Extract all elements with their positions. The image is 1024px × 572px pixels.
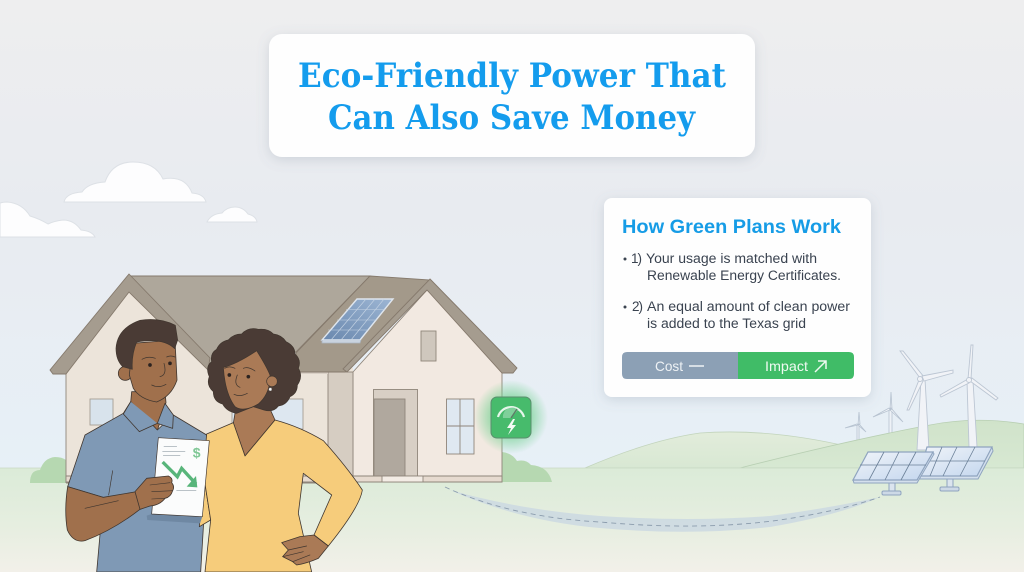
woman [199,329,362,572]
house walls [66,290,502,482]
large wind turbines [900,345,998,450]
ground [0,468,1024,572]
right gable trim [343,279,517,373]
woman face [223,351,277,409]
title text: Can Also Save Money [328,98,696,138]
clouds [0,162,257,237]
card steps: 1) [631,251,642,266]
right roof slope [296,276,430,372]
info card [604,198,871,397]
woman neck [233,402,275,456]
woman hair [208,329,301,413]
man collar [123,402,173,432]
cost and impact bar: Cost [655,358,683,374]
house porch column [328,372,353,482]
door [374,390,418,476]
power line [445,487,880,532]
card steps [624,251,851,331]
middle window [232,399,303,429]
card steps: Renewable Energy Certificates. [647,268,841,283]
foundation [66,476,502,482]
solar panel front [853,452,934,495]
man shirt [68,402,207,572]
woman sweater [203,420,362,572]
title text [298,56,726,138]
roof solar panel [322,299,393,343]
main roof [129,276,370,364]
solar panels [853,447,993,495]
left gable trim [50,274,210,374]
card heading: How Green Plans Work [622,217,841,238]
woman back arm [199,473,211,527]
man arm [66,487,150,541]
bill paper: $ [193,444,201,460]
right window [446,399,474,454]
solar panel back [919,447,993,491]
smart meter icon [474,380,548,454]
cost and impact bar [622,352,854,379]
title card [269,34,755,157]
house [50,274,517,483]
title text: Eco-Friendly Power That [298,56,726,96]
small wind turbines [845,392,903,445]
man head [116,320,178,402]
card steps: is added to the Texas grid [647,316,806,331]
card steps: Your usage is matched with [646,251,817,266]
cost and impact bar: Impact [765,358,808,374]
left window [90,399,113,425]
people [66,320,362,572]
man neck [131,392,166,431]
bill paper [147,438,209,523]
woman hand on hip [282,535,328,565]
card steps: An equal amount of clean power [647,299,851,314]
man sleeve fold [109,471,113,495]
bushes [30,452,552,483]
man [66,320,207,572]
front hill [740,420,1024,468]
back hill [585,432,850,468]
attic window [421,331,436,361]
man hand [135,476,174,509]
card steps: 2) [632,299,643,314]
